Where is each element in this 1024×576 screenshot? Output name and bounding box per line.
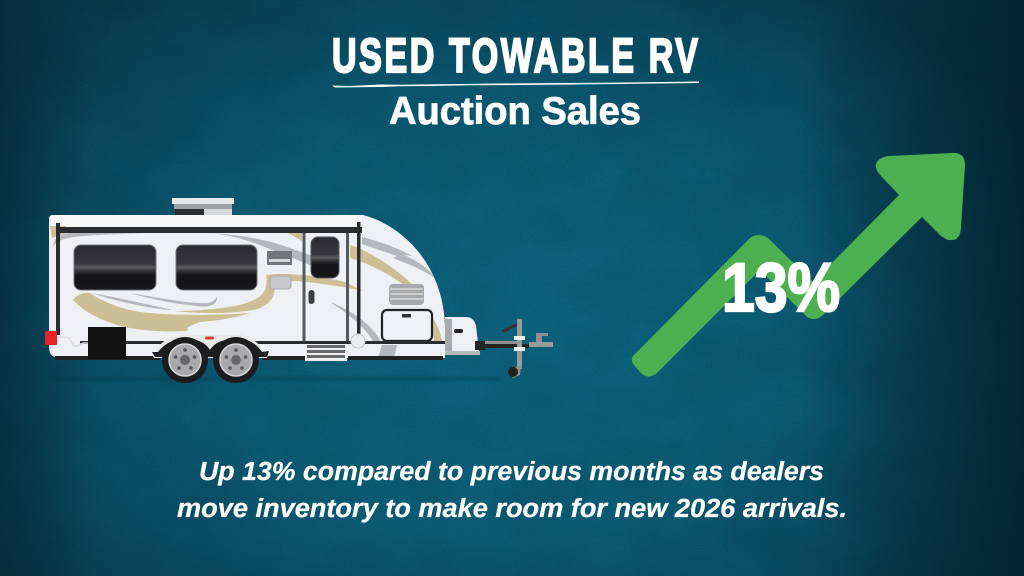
RV travel trailer illustration [45, 198, 553, 383]
black storage box [88, 327, 126, 359]
under-body line [55, 356, 160, 360]
wheel right [213, 337, 259, 383]
front storage box [445, 317, 480, 355]
fender [152, 335, 269, 358]
brushed underline [332, 82, 699, 88]
entry steps [305, 344, 347, 361]
wheel well badge [351, 334, 365, 348]
tow hitch and jack [475, 319, 553, 378]
description text [177, 458, 847, 523]
ground shadow [50, 376, 500, 381]
title: USED TOWABLE RV [332, 28, 698, 82]
window 1 [74, 245, 156, 290]
awning rail [57, 227, 362, 233]
green growth arrow [632, 153, 965, 376]
description line 2: move inventory to make room for new 2026 arrivals. [177, 495, 847, 523]
roof cap strip [49, 215, 363, 227]
trailer body [49, 215, 445, 358]
awning right arm [357, 222, 360, 334]
stat: 13%: 13% [722, 249, 840, 326]
door frame [302, 233, 349, 341]
door handle [308, 290, 314, 304]
rear red light [45, 331, 57, 345]
wall hatch [270, 276, 291, 289]
lower frame stripe [80, 341, 445, 344]
rear light cable [57, 337, 90, 346]
storage door [382, 310, 432, 341]
subtitle: Auction Sales [389, 90, 641, 133]
description line 1: Up 13% compared to previous months as dealers [199, 458, 824, 486]
wheel left [162, 337, 208, 383]
window 2 [176, 245, 257, 290]
fender marker [205, 336, 214, 340]
front vent [389, 284, 424, 305]
door window [311, 237, 339, 278]
gold swooshes [50, 226, 442, 341]
wall vent [267, 251, 292, 265]
awning left arm [56, 223, 60, 335]
roof air conditioner [172, 198, 234, 215]
grey swooshes [53, 232, 435, 358]
